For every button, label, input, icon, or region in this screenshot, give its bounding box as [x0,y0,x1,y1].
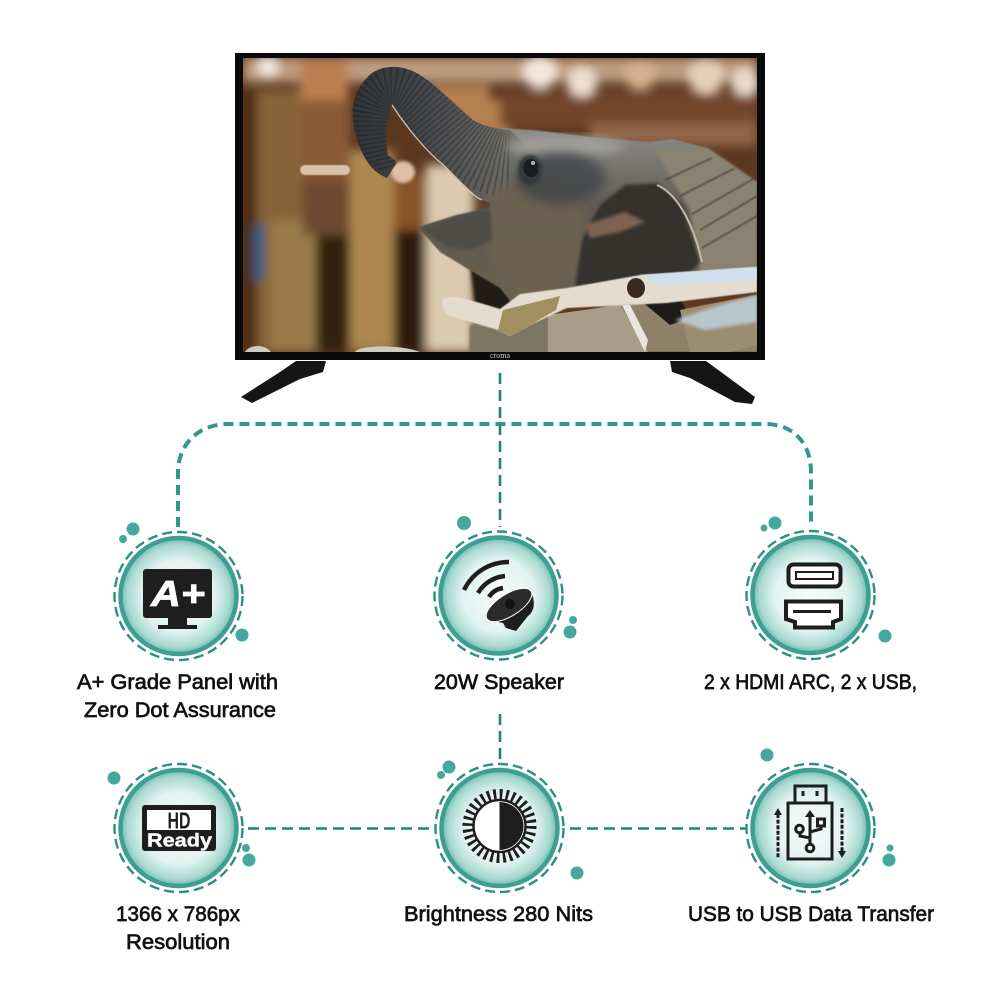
icon: monitor A+ [143,569,212,629]
badge circle [114,532,242,660]
icon: USB port [788,564,840,586]
icon: HDMI port [786,602,841,628]
tv screen: elephant photo [243,55,759,352]
elephant face shading [485,180,584,262]
label: Zero Dot Assurance [84,698,276,722]
trunk wrinkles [364,84,510,172]
lower vertical connector [499,714,501,760]
feature: brightness [404,760,593,926]
label: 20W Speaker [434,670,564,694]
dark shadow behind mouth [468,269,510,310]
badge circle [746,531,874,659]
decorative dots [760,748,896,866]
television [235,53,765,404]
feature: HDMI and USB ports [704,516,917,694]
badge circle [436,764,564,892]
label: USB to USB Data Transfer [688,902,934,926]
feature: USB data transfer [688,748,934,926]
tv stand: left foot [241,361,326,403]
elephant head and body [418,128,757,310]
icon: half sun [468,794,532,858]
elephant trunk [353,67,530,202]
left horizontal connector [248,827,432,830]
icon: USB stick [774,786,846,859]
croma logo: croma [490,351,510,360]
decorative dots [119,522,248,642]
icon: speaker [464,562,537,631]
icon: monitor A+: A+ [150,573,205,614]
icon: HD ready [142,805,216,851]
badge circle [434,532,562,660]
decorative dots [457,516,577,638]
feature: HD ready resolution [108,764,256,954]
label: 1366 x 786px [116,902,240,926]
label: A+ Grade Panel with [77,670,278,694]
log [442,267,757,336]
decorative dots [760,516,892,642]
label: Resolution [126,930,230,954]
decorative dots [108,772,256,866]
tv stand: right foot [670,361,755,404]
wooden stump [470,295,757,352]
label: 2 x HDMI ARC, 2 x USB, [704,670,917,694]
decorative dots [437,760,584,880]
feature: 20W speaker [434,516,577,694]
badge circle [746,764,874,892]
elephant eye [518,155,542,185]
tv bezel [235,53,765,360]
icon: HD ready: Ready [147,830,212,850]
icon: HD ready: HD [168,808,190,834]
feature: A+ grade panel [77,522,278,722]
elephant wrinkles [665,158,757,248]
centre vertical connector [499,373,501,527]
top dashed connector [178,424,811,527]
badge circle [114,764,242,892]
floor highlights [245,346,420,352]
label: Brightness 280 Nits [404,902,593,926]
elephant body tone [655,148,757,275]
elephant ear [575,183,700,287]
right horizontal connector [570,827,746,830]
